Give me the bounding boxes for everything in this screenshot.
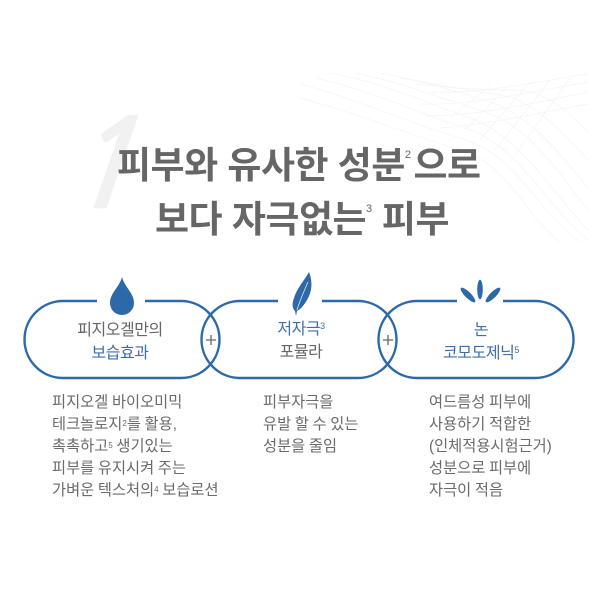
plus sign left — [206, 335, 216, 345]
icon: feather — [293, 272, 311, 316]
pill label: left: 보습효과 — [91, 345, 149, 362]
body text: right: 여드름성 피부에 — [429, 394, 531, 411]
body text: left: 가벼운 텍스처의4 보습로션 — [52, 482, 219, 499]
body text: right — [429, 394, 552, 499]
icon: water drop — [110, 277, 134, 315]
body text: right: 사용하기 적합한 — [429, 416, 531, 433]
body text: left: 피부를 유지시켜 주는 — [52, 460, 186, 477]
pill label: right: 코모도제닉5 — [443, 345, 519, 362]
body text: right: 자극이 적음 — [429, 482, 503, 499]
large faint numeral 1: 1 — [53, 106, 170, 227]
pill label: left — [77, 322, 163, 362]
pill: right outline — [378, 301, 574, 378]
title line 2: 보다 자극없는3 피부 — [155, 199, 449, 240]
pill diagram — [23, 272, 575, 380]
body text: middle: 유발 할 수 있는 — [263, 416, 358, 433]
body text: middle: 피부자극을 — [263, 394, 333, 411]
body text: left: 피지오겔 바이오미믹 — [52, 394, 182, 411]
background wave mesh — [300, 72, 588, 242]
pill label: middle: 포뮬라 — [280, 344, 322, 361]
pill label: middle: 저자극3 — [277, 321, 325, 338]
body text: right: 성분으로 피부에 — [429, 460, 531, 477]
body text: middle — [263, 394, 358, 455]
pill: middle outline — [202, 301, 396, 378]
body text: left — [52, 394, 219, 499]
pill label: left: 피지오겔만의 — [77, 322, 163, 339]
body text: middle: 성분을 줄임 — [263, 438, 337, 455]
pill: left outline — [24, 301, 220, 378]
pill label: right — [443, 322, 519, 362]
body text: left: 테크놀로지2를 활용, — [52, 416, 177, 433]
title line 1: 피부와 유사한 성분2으로 — [117, 145, 481, 186]
body text: right: (인체적용시험근거) — [429, 438, 552, 455]
icon: sparkle burst — [459, 280, 502, 304]
pill label: right: 논 — [474, 322, 488, 339]
plus sign right — [383, 335, 393, 345]
body text: left: 촉촉하고5 생기있는 — [52, 438, 173, 455]
pill label: middle — [277, 320, 325, 361]
